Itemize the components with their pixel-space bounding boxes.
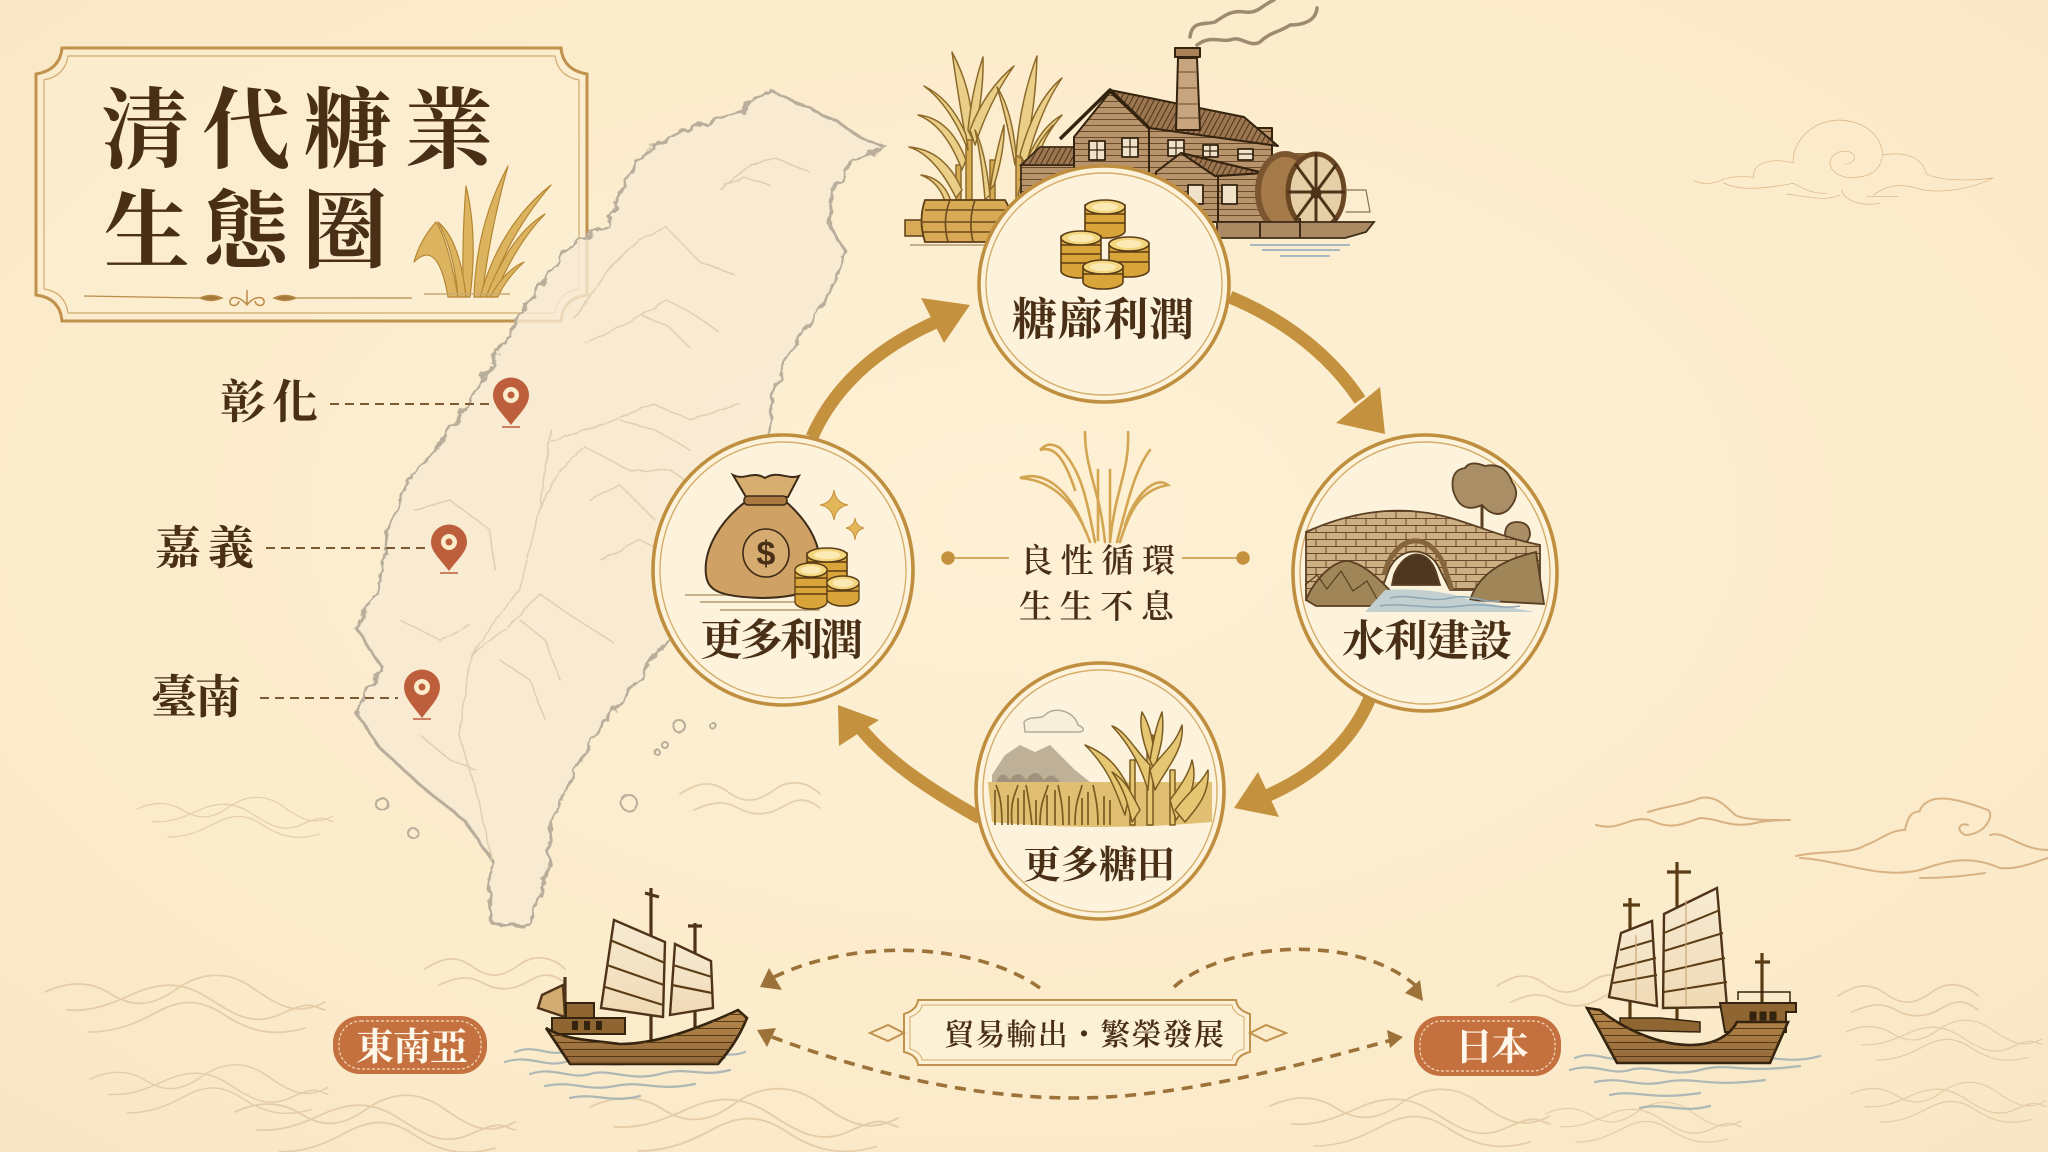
arrow: to Japan upper — [1174, 949, 1423, 1001]
label: 嘉義 — [155, 523, 467, 574]
label: 臺南 — [151, 670, 440, 723]
masts — [1623, 862, 1770, 1030]
label: trade banner — [870, 1000, 1286, 1065]
hull — [1587, 1008, 1788, 1063]
label: 彰化 — [220, 377, 529, 428]
label: 臺南: 臺南 — [151, 672, 241, 723]
label: trade banner: 貿易輸出・繁榮發展 — [944, 1019, 1224, 1052]
icon: cloud top right — [1694, 120, 1993, 204]
node: 更多利潤: 更多利潤 — [700, 617, 863, 665]
label: 嘉義: 嘉義 — [155, 523, 254, 574]
label: 東南亞: 東南亞 — [356, 1027, 468, 1069]
arrow: 更多利潤 to 糖廍利潤 — [812, 298, 970, 437]
node: 更多利潤 — [653, 435, 913, 705]
arrow: 水利建設 to 更多糖田 — [1234, 698, 1370, 817]
node: 更多糖田: 更多糖田 — [1023, 845, 1175, 887]
ornament divider — [84, 290, 412, 306]
cabin — [1620, 992, 1796, 1032]
icon: outline cane — [1020, 432, 1168, 542]
icon: money bag: $ — [757, 535, 776, 573]
node: 水利建設: 水利建設 — [1342, 618, 1512, 666]
sails — [1609, 888, 1727, 1008]
sails — [538, 920, 713, 1017]
smoke — [1190, 0, 1317, 45]
icon: pin 嘉義 — [431, 524, 467, 573]
chimney — [1175, 48, 1200, 130]
arrow: 更多糖田 to 更多利潤 — [838, 705, 980, 818]
node: 糖廍利潤: 糖廍利潤 — [1012, 295, 1194, 345]
arrows: cycle — [812, 297, 1385, 818]
hull — [546, 1010, 747, 1064]
water — [1570, 1055, 1820, 1109]
icon: sugar cane — [414, 166, 551, 297]
sugar cane grove — [909, 52, 1062, 205]
cane bundle — [905, 200, 1012, 245]
heading: 清代糖業 — [101, 84, 504, 181]
icon: sugar cane field — [988, 710, 1212, 827]
cabin — [552, 1003, 625, 1034]
connector dots — [942, 552, 1249, 564]
small islands — [376, 720, 716, 838]
label: 日本 — [1414, 1016, 1561, 1076]
text: 良性循環 — [1020, 543, 1175, 580]
ship: left junk — [505, 888, 747, 1099]
illustration: sugar mill — [905, 0, 1374, 256]
trade routes — [757, 949, 1423, 1098]
node: 糖廍利潤 — [979, 166, 1229, 402]
icon: money bag — [685, 475, 864, 610]
masts — [565, 888, 702, 1040]
side wing — [1021, 165, 1076, 197]
decorative waves — [45, 783, 2046, 1152]
arrow: lower two-way — [757, 1028, 1403, 1098]
mill base and water — [1217, 218, 1374, 256]
map: Taiwan — [356, 89, 884, 925]
water wheel — [1258, 153, 1370, 230]
heading — [101, 84, 504, 280]
mountain ridges — [400, 158, 810, 860]
node: 水利建設 — [1293, 435, 1557, 711]
ship: right junk — [1570, 862, 1820, 1109]
main building — [1060, 48, 1278, 222]
icon: cloud lower right — [1596, 797, 2048, 878]
icon: pin 臺南 — [404, 670, 440, 719]
node: 更多糖田 — [976, 663, 1224, 919]
water — [505, 1049, 745, 1099]
heading: 生態圈 — [104, 184, 388, 280]
icon: stone bridge — [1305, 463, 1544, 612]
icon: gold coins — [1061, 200, 1149, 289]
arrow: to Southeast Asia upper — [760, 950, 1040, 990]
icon: pin 彰化 — [493, 378, 529, 427]
center: cycle motto — [942, 432, 1249, 626]
arrow: 糖廍利潤 to 水利建設 — [1230, 297, 1385, 434]
center: cycle motto: 生生不息 — [1019, 589, 1176, 626]
label: 彰化: 彰化 — [220, 377, 318, 428]
panel: title — [36, 48, 587, 321]
label: 日本: 日本 — [1455, 1027, 1529, 1069]
label: 東南亞 — [333, 1016, 487, 1074]
